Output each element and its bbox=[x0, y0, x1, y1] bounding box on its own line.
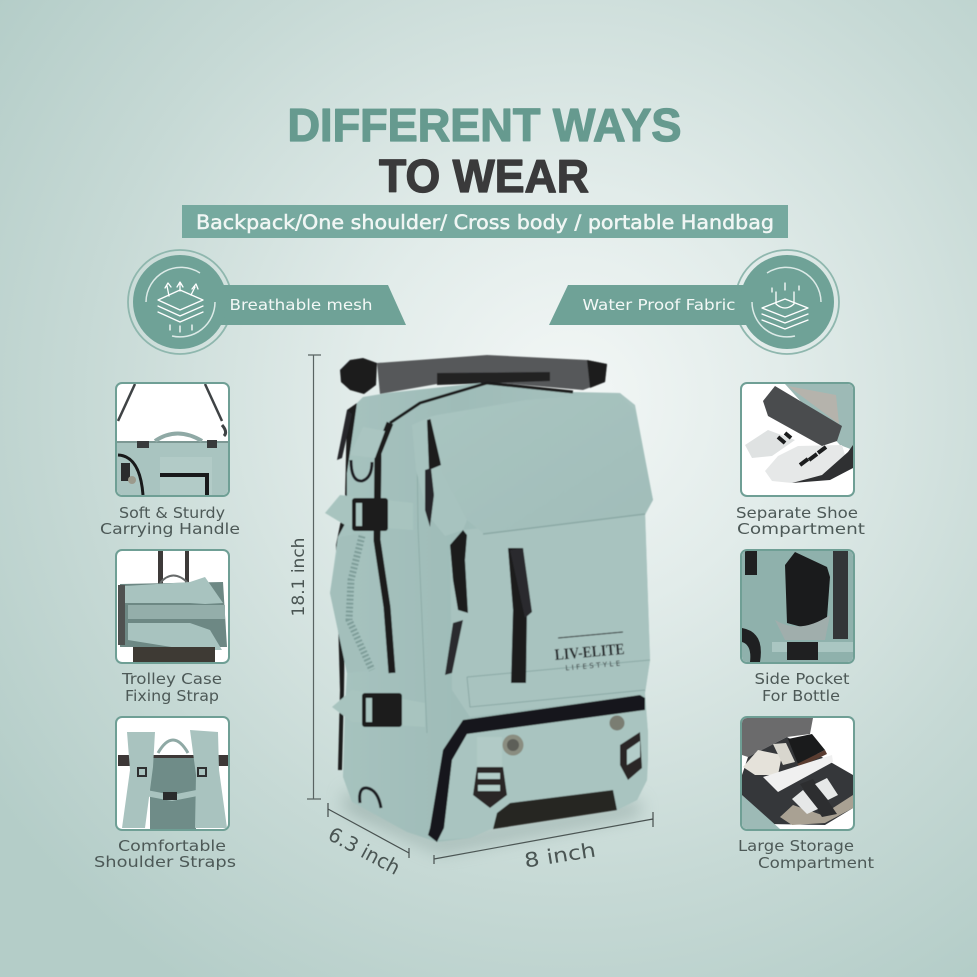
strap tab and zipper pull bbox=[350, 427, 385, 458]
side straps with buckles bbox=[325, 495, 425, 727]
feature: trolley case fixing strap bbox=[116, 550, 229, 663]
label: side pocket for bottle: For Bottle bbox=[762, 687, 840, 705]
label: large storage compartment bbox=[738, 837, 874, 872]
label: comfortable straps: Shoulder Straps bbox=[94, 853, 236, 871]
subtitle banner: Backpack/One shoulder/ Cross body / portable Handbag bbox=[196, 211, 774, 234]
label: trolley case fixing strap: Fixing Strap bbox=[125, 687, 219, 705]
seam bbox=[417, 440, 427, 733]
label: soft and sturdy carrying handle: Soft & Sturdy bbox=[119, 504, 225, 522]
back strip bbox=[336, 403, 357, 770]
side mesh pocket bbox=[330, 533, 373, 673]
label: separate shoe compartment: Separate Shoe bbox=[736, 504, 858, 522]
logo bbox=[554, 632, 625, 672]
label: trolley case fixing strap: Trolley Case bbox=[121, 670, 222, 688]
label: separate shoe compartment: Compartment bbox=[737, 520, 865, 538]
title bbox=[288, 99, 682, 202]
dimension: width 8 inch bbox=[434, 812, 653, 873]
logo: LIV-ELITE bbox=[554, 641, 625, 664]
backpack product bbox=[325, 355, 653, 842]
label: large storage compartment: Compartment bbox=[758, 854, 874, 872]
title: DIFFERENT WAYS bbox=[288, 99, 682, 151]
label: side pocket for bottle bbox=[754, 670, 850, 705]
badge: breathable mesh: Breathable mesh bbox=[230, 296, 372, 314]
bottom pocket bbox=[437, 698, 648, 840]
label: soft and sturdy carrying handle: Carrying Handle bbox=[100, 520, 240, 538]
main body bbox=[330, 383, 653, 842]
label: comfortable straps bbox=[94, 837, 236, 871]
label: side pocket for bottle: Side Pocket bbox=[754, 670, 850, 688]
lower front panel bbox=[450, 510, 650, 717]
label: soft and sturdy carrying handle bbox=[100, 504, 240, 538]
front panel zipper middle bbox=[508, 548, 527, 683]
label: comfortable straps: Comfortable bbox=[118, 837, 226, 855]
label: trolley case fixing strap bbox=[121, 670, 222, 705]
feature: large storage bbox=[741, 717, 854, 830]
logo: LIFESTYLE bbox=[565, 660, 621, 672]
subtitle banner bbox=[182, 205, 788, 238]
title: TO WEAR bbox=[379, 150, 589, 202]
bottom grab handle bbox=[493, 790, 617, 829]
upper side pocket bbox=[412, 417, 467, 536]
badge: water proof fabric: Water Proof Fabric bbox=[582, 296, 736, 314]
main zipper bbox=[390, 383, 573, 423]
dimension: height 18.1 inch: 18.1 inch bbox=[289, 538, 309, 616]
feature: comfortable straps bbox=[116, 717, 229, 830]
feature: separate shoe compartment bbox=[741, 383, 854, 496]
front panel zipper left bbox=[450, 530, 468, 613]
d-rings bbox=[351, 460, 381, 808]
ground shadow bbox=[345, 790, 640, 852]
label: separate shoe compartment bbox=[736, 504, 865, 538]
icon: layered mesh with arrows bbox=[158, 282, 203, 332]
icon: layered fabric with water drops bbox=[762, 283, 808, 329]
feature: soft and sturdy carrying handle bbox=[116, 383, 229, 496]
badge: water proof fabric bbox=[549, 250, 839, 354]
badge: breathable mesh bbox=[128, 250, 406, 354]
feature: side pocket for bottle bbox=[741, 550, 854, 663]
dimension: depth 6.3 inch: 6.3 inch bbox=[324, 822, 404, 880]
front buckles bbox=[473, 716, 642, 808]
rolled mat on top bbox=[340, 355, 607, 394]
label: large storage compartment: Large Storage bbox=[738, 837, 854, 855]
flap bbox=[430, 393, 653, 533]
dimension: height 18.1 inch bbox=[289, 355, 321, 799]
dimension: width 8 inch: 8 inch bbox=[522, 838, 597, 873]
